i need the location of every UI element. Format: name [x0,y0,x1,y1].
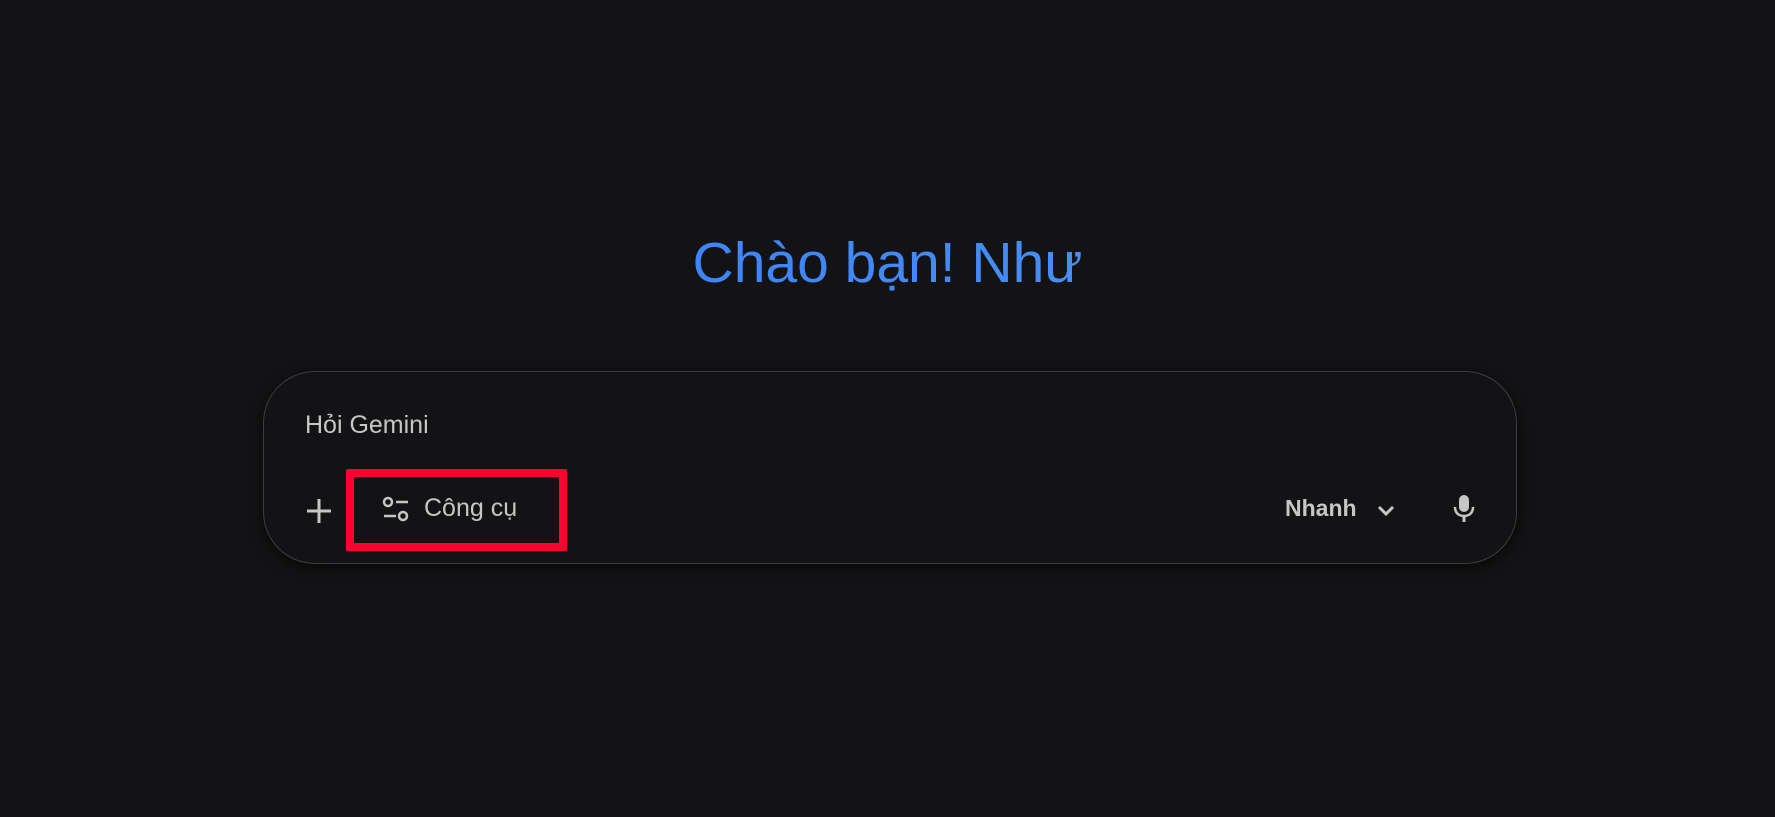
title: Chào bạn! Như [693,231,1082,295]
mode selector: Nhanh: Nhanh [1285,495,1357,521]
input box [263,371,1517,564]
label: Công cụ: Công cụ [424,494,517,522]
icon: plus [307,499,331,523]
title [600,228,1175,298]
placeholder text: Hỏi Gemini [305,411,429,439]
icon: microphone [1454,495,1474,522]
icon: chevron [1378,506,1394,516]
highlighted tools button [346,469,567,551]
icon: sliders [382,496,408,522]
